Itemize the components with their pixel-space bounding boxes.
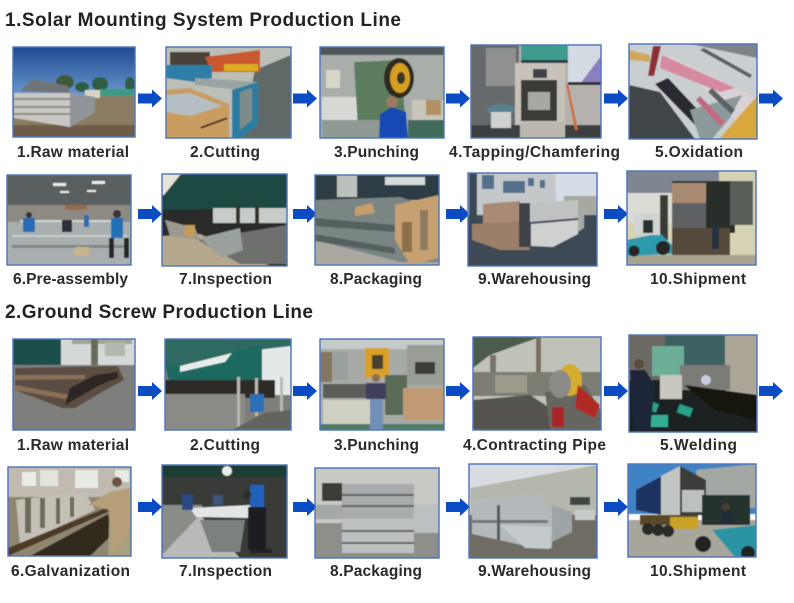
arrow: [138, 205, 162, 223]
arrow: [293, 205, 317, 223]
label: warehousing: 9.Warehousing: [478, 271, 591, 288]
arrow: [604, 90, 628, 108]
panel: solar mounting system production line: [5, 10, 783, 288]
arrow: [138, 498, 162, 516]
label: pre-assembly: 6.Pre-assembly: [13, 271, 128, 288]
photo: packaging: [315, 175, 439, 265]
label: shipment truck: 10.Shipment: [650, 563, 746, 580]
arrow: [138, 90, 162, 108]
photo: contracting pipe: [473, 337, 601, 430]
label: punching pipes: 3.Punching: [334, 437, 419, 454]
arrow: [446, 498, 470, 516]
photo: tapping and chamfering: [471, 45, 601, 138]
label: shipment: 10.Shipment: [650, 271, 746, 288]
arrow: [604, 382, 628, 400]
label: raw material: 1.Raw material: [17, 144, 129, 161]
arrow: [446, 90, 470, 108]
photo: cutting: [166, 47, 291, 138]
label: packaging racks: 8.Packaging: [330, 563, 422, 580]
arrow: [759, 382, 783, 400]
photo: punching: [320, 47, 444, 138]
label: contracting pipe: 4.Contracting Pipe: [463, 437, 606, 454]
label: welding: 5.Welding: [660, 437, 737, 454]
label: cutting pipes: 2.Cutting: [190, 437, 260, 454]
photo: raw material pipes: [13, 339, 135, 430]
arrow: [604, 498, 628, 516]
label: raw material pipes: 1.Raw material: [17, 437, 129, 454]
label: cutting: 2.Cutting: [190, 144, 260, 161]
label: inspection: 7.Inspection: [179, 271, 272, 288]
photo: inspection: [162, 174, 287, 266]
photo: cutting pipes: [165, 339, 291, 430]
panel: ground screw production line: [5, 302, 783, 580]
title: section 1: 1.Solar Mounting System Production Line: [5, 10, 401, 31]
photo: oxidation: [629, 44, 757, 139]
photo: warehousing: [468, 173, 597, 266]
photo: galvanization: [8, 467, 131, 556]
arrow: [604, 205, 628, 223]
label: packaging: 8.Packaging: [330, 271, 422, 288]
arrow: [293, 498, 317, 516]
photo: shipment truck: [628, 464, 756, 560]
photo: raw material: [13, 47, 135, 137]
label: tapping and chamfering: 4.Tapping/Chamfering: [449, 144, 620, 161]
arrow: [446, 382, 470, 400]
title: section 2: 2.Ground Screw Production Line: [5, 302, 313, 323]
label: galvanization: 6.Galvanization: [11, 563, 130, 580]
arrow: [138, 382, 162, 400]
label: oxidation: 5.Oxidation: [655, 144, 743, 161]
photo: inspection frames: [162, 465, 287, 558]
arrow: [446, 205, 470, 223]
photo: warehousing racks: [469, 464, 597, 558]
photo: welding: [629, 335, 757, 432]
photo: packaging racks: [315, 468, 439, 558]
arrow: [293, 90, 317, 108]
label: punching: 3.Punching: [334, 144, 419, 161]
photo: punching pipes: [320, 339, 444, 430]
label: inspection frames: 7.Inspection: [179, 563, 272, 580]
photo: shipment: [627, 171, 756, 265]
label: warehousing racks: 9.Warehousing: [478, 563, 591, 580]
arrow: [293, 382, 317, 400]
photo: pre-assembly: [7, 175, 131, 265]
arrow: [759, 90, 783, 108]
